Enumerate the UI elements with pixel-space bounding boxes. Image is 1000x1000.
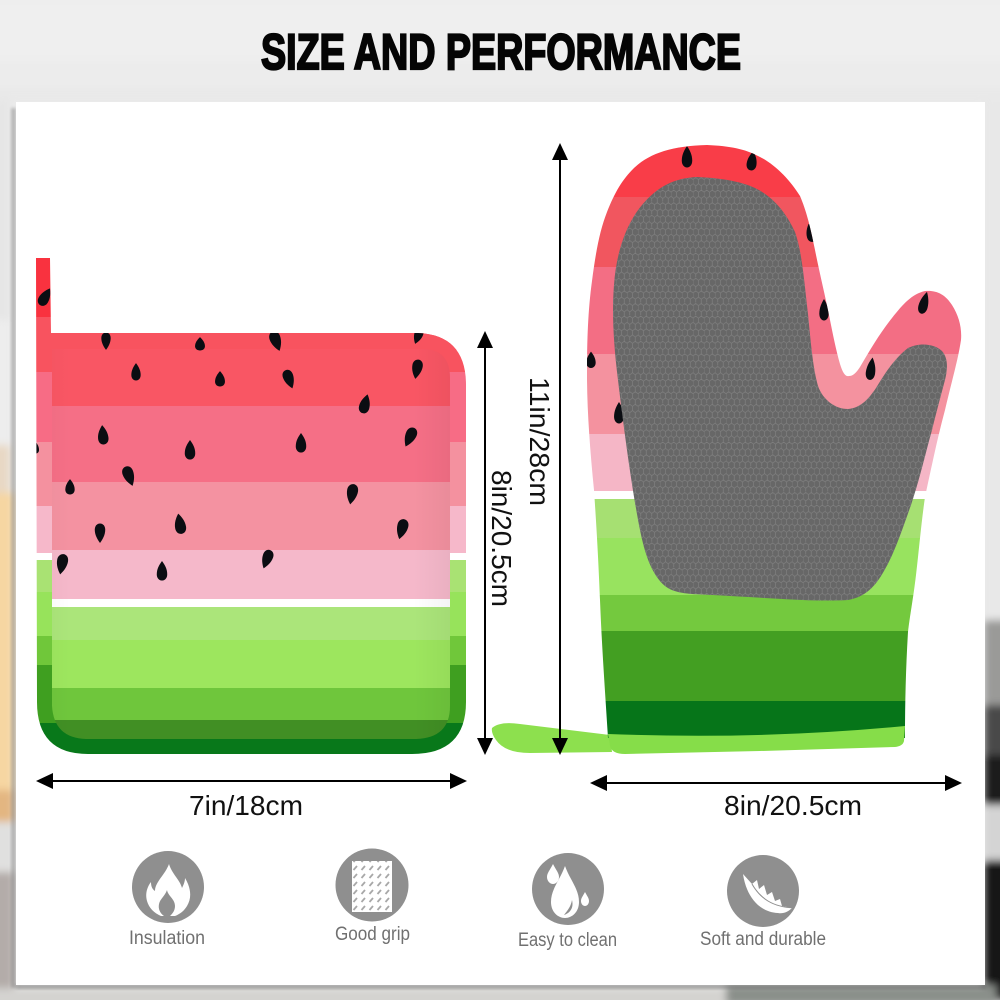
pot holder inner pad stripes [50, 345, 454, 745]
icon: feather [727, 855, 799, 927]
label: holder width: 7in/18cm [189, 790, 303, 821]
feature: good grip [335, 848, 410, 945]
pot holder seeds [33, 286, 425, 580]
label: mitt width: 8in/20.5cm [724, 790, 862, 821]
dimension arrow: holder width [36, 773, 467, 789]
feature: insulation [129, 851, 205, 949]
icon: water drops [532, 853, 604, 925]
icon: grip sheet [336, 848, 408, 922]
dimension arrow: mitt height [552, 143, 568, 755]
pot holder outer binding stripes [30, 250, 471, 758]
dimension arrow: mitt width [590, 775, 962, 791]
oven mitt [492, 140, 970, 754]
label: mitt height: 11in/28cm [524, 377, 555, 506]
title: SIZE AND PERFORMANCE [261, 24, 741, 80]
caption: easy to clean: Easy to clean [518, 930, 617, 951]
icon: flame [132, 851, 204, 923]
mitt silicone honeycomb palm [613, 177, 947, 601]
feature: soft and durable [700, 855, 826, 950]
caption: insulation: Insulation [129, 928, 205, 949]
feature: easy to clean [518, 853, 617, 951]
mitt stripes [580, 140, 970, 739]
pot holder [30, 250, 471, 758]
mitt cuff [608, 726, 905, 754]
caption: soft and durable: Soft and durable [700, 929, 826, 950]
label: holder height: 8in/20.5cm [486, 470, 517, 607]
mitt hanging loop [492, 723, 612, 753]
dimension arrow: holder height [477, 331, 493, 755]
caption: good grip: Good grip [335, 924, 410, 945]
